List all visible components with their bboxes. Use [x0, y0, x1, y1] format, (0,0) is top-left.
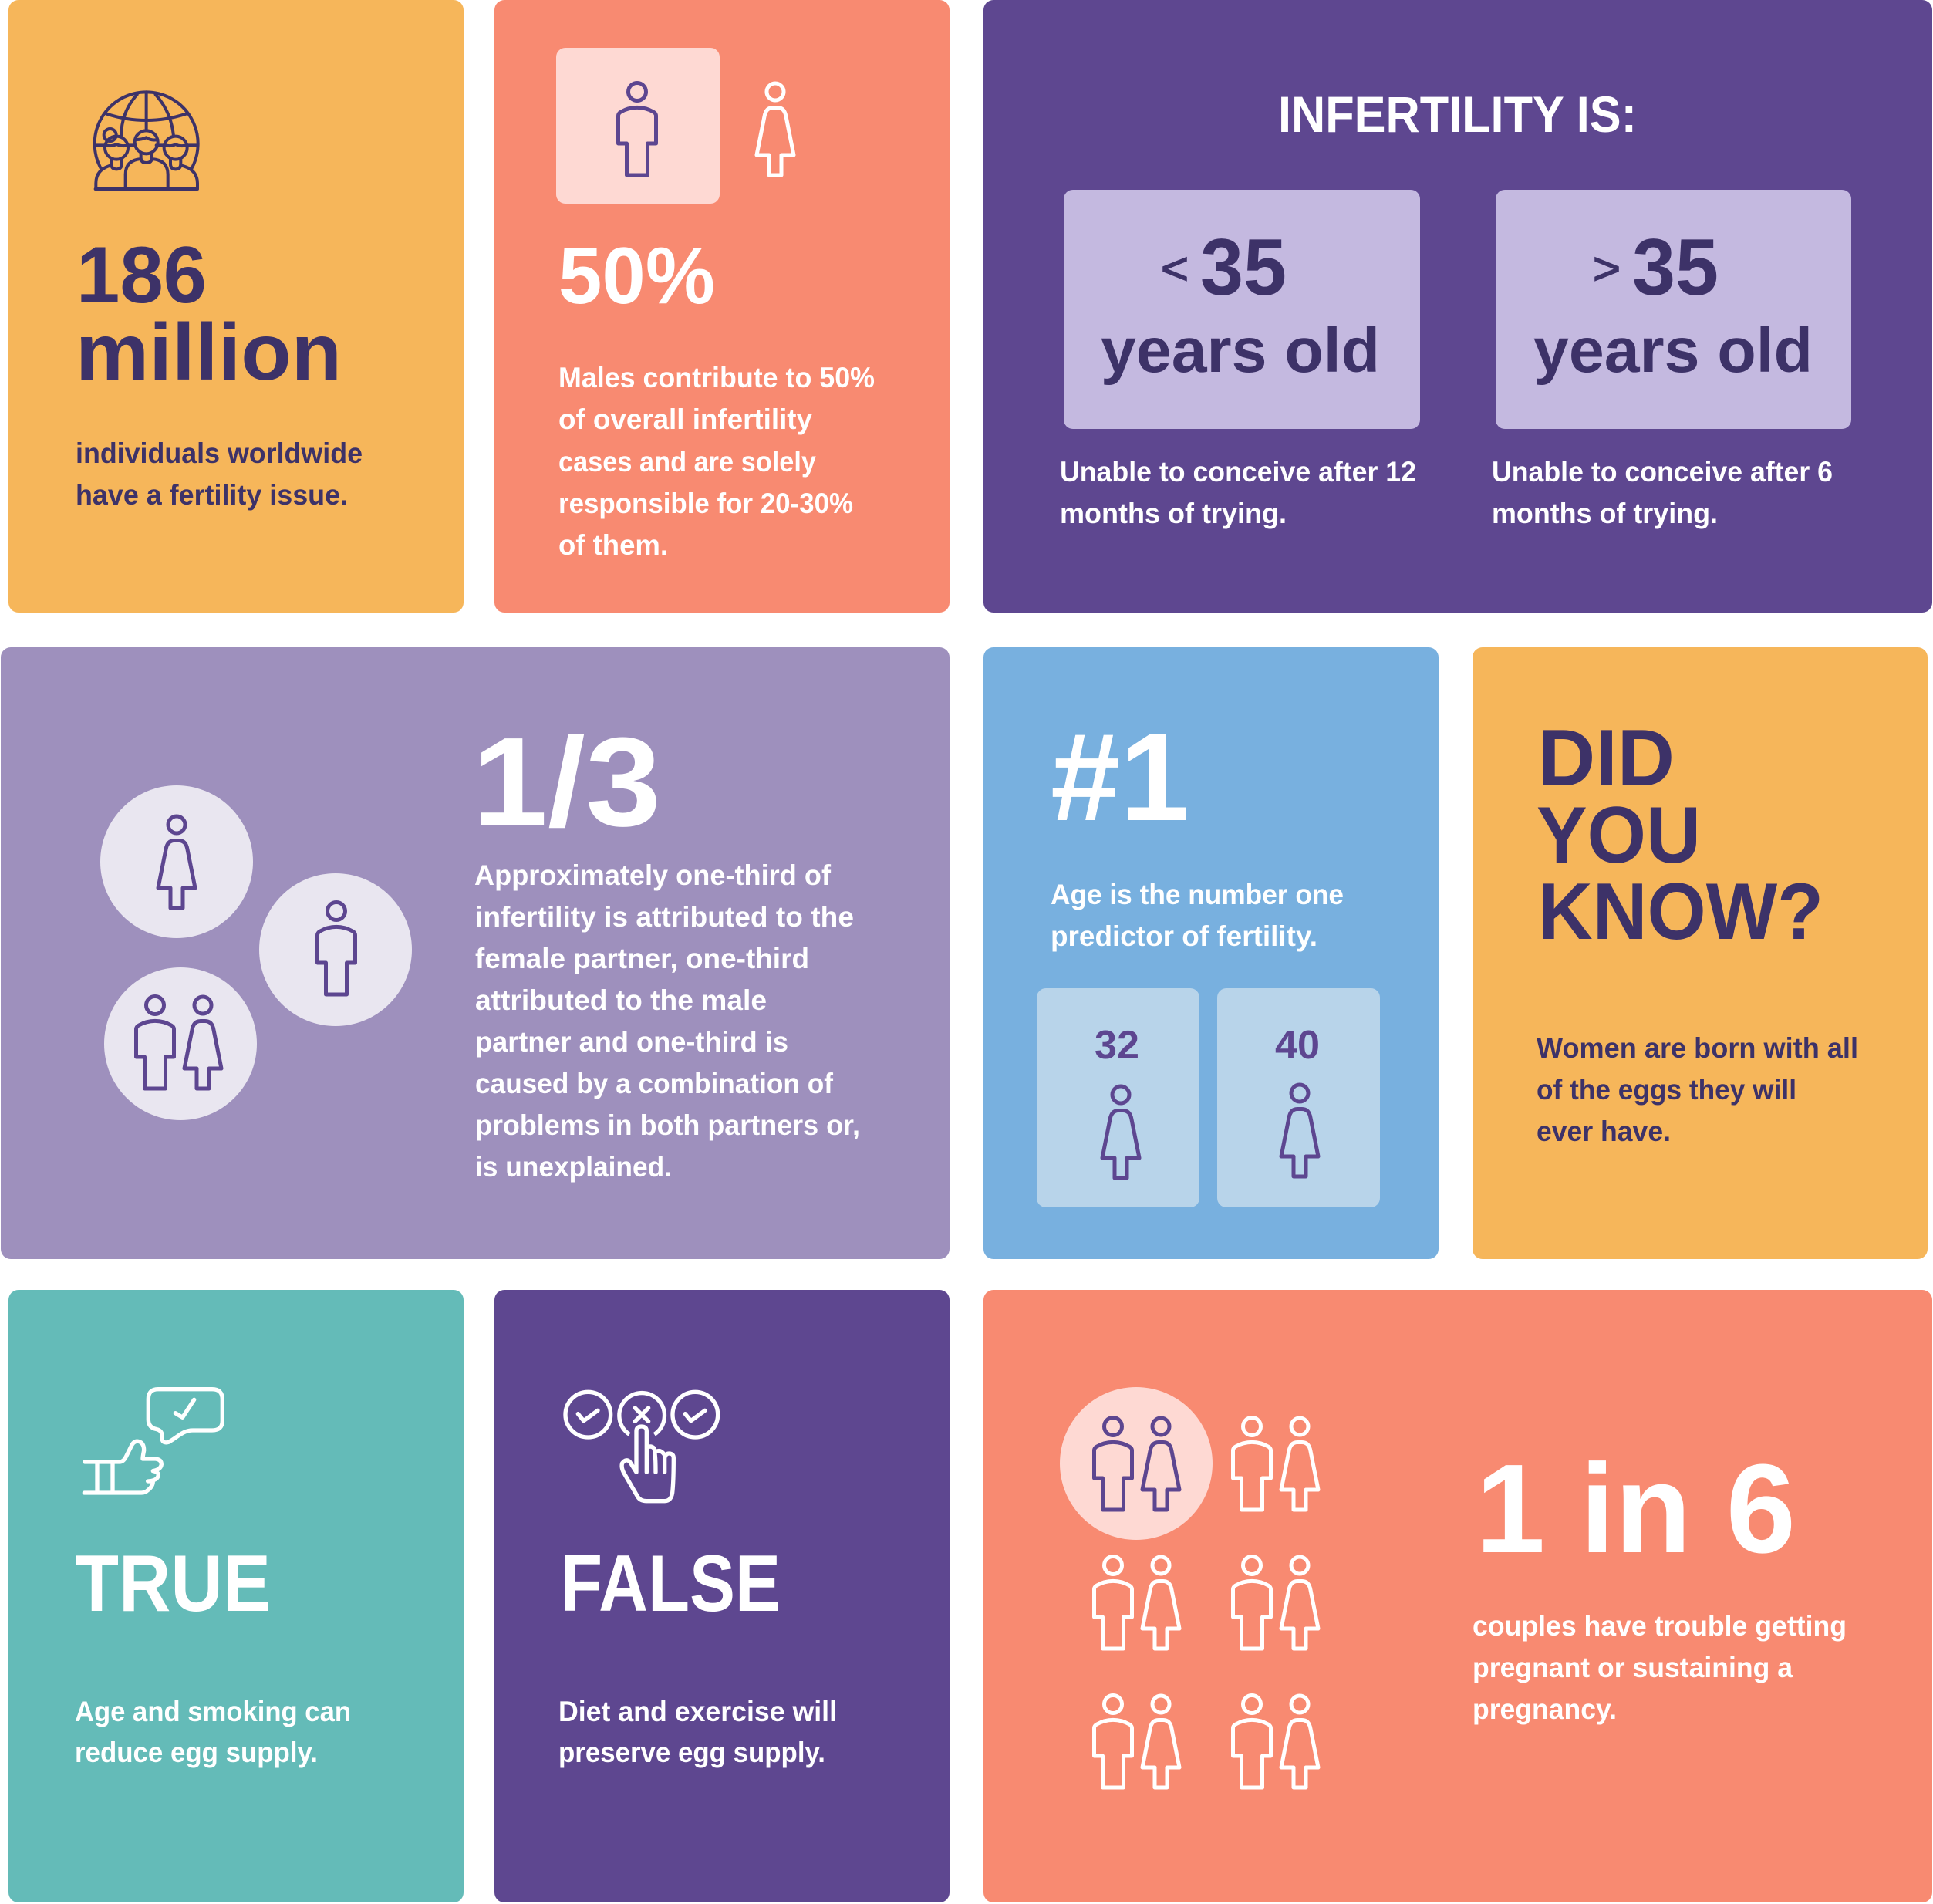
box: over 35: 35	[1632, 223, 1719, 312]
text: one third explanation: partner and one-third is	[475, 1026, 788, 1058]
text: males contribute: of them.	[558, 529, 668, 561]
text: individuals worldwide: have a fertility issue.	[76, 479, 348, 511]
icon: couple row 2 left	[1094, 1557, 1179, 1649]
heading: 186 million: million	[76, 308, 342, 397]
text: eggs fact: ever have.	[1537, 1116, 1671, 1147]
box: over 35: years old	[1533, 316, 1813, 386]
text: over 35 definition	[1492, 456, 1833, 529]
text: over 35 definition: months of trying.	[1492, 498, 1718, 529]
panel: false	[494, 1290, 950, 1902]
text: males contribute: cases and are solely	[558, 446, 816, 478]
heading: 50%: 50%	[558, 231, 715, 321]
text: one third explanation: attributed to the male	[475, 984, 767, 1016]
icon: hand selecting option	[565, 1392, 718, 1501]
box: over 35: >	[1593, 244, 1621, 294]
text: under 35 definition: Unable to conceive after 12	[1060, 456, 1416, 488]
text: one third explanation: infertility is attributed to the	[475, 901, 854, 933]
heading: 186 million: 186	[76, 231, 207, 320]
icon: couple row 1 right	[1233, 1418, 1318, 1510]
icon: thumbs up with speech bubble	[84, 1389, 222, 1493]
text: one third explanation: is unexplained.	[475, 1151, 672, 1183]
text: age and smoking	[75, 1696, 351, 1768]
text: individuals worldwide	[76, 437, 363, 511]
text: males contribute	[558, 362, 875, 561]
text: one third explanation: problems in both partners or,	[475, 1109, 860, 1141]
icon: woman	[757, 83, 794, 175]
text: males contribute: of overall infertility	[558, 403, 812, 435]
text: age and smoking: Age and smoking can	[75, 1696, 351, 1727]
text: age predictor	[1051, 879, 1344, 952]
text: one third explanation: female partner, one-third	[475, 943, 809, 974]
text: individuals worldwide: individuals worldwide	[76, 437, 363, 469]
panel: one third	[1, 647, 950, 1259]
box: under 35: years old	[1101, 316, 1380, 386]
panel: number one	[983, 647, 1439, 1259]
heading: true: TRUE	[75, 1539, 271, 1629]
box: age 32: 32	[1095, 1023, 1139, 1068]
text: eggs fact	[1537, 1032, 1858, 1147]
panel: true	[8, 1290, 464, 1902]
text: one third explanation: Approximately one-third of	[474, 859, 832, 891]
highlight box	[556, 48, 720, 204]
text: eggs fact: Women are born with all	[1537, 1032, 1858, 1064]
text: one third explanation	[474, 859, 860, 1183]
heading: did you know: KNOW?	[1538, 867, 1823, 957]
heading: 1 in 6: 1 in 6	[1476, 1438, 1796, 1579]
icon: couple row 2 right	[1233, 1557, 1318, 1649]
box: age 40: 40	[1275, 1023, 1320, 1068]
text: diet and exercise: preserve egg supply.	[558, 1737, 825, 1768]
heading: false: FALSE	[561, 1539, 781, 1629]
box: age 40	[1217, 988, 1380, 1207]
text: diet and exercise	[558, 1696, 837, 1768]
text: couples trouble: pregnancy.	[1473, 1693, 1617, 1725]
box: age 32	[1037, 988, 1199, 1207]
box: under 35	[1064, 190, 1420, 429]
text: over 35 definition: Unable to conceive after 6	[1492, 456, 1833, 488]
text: age and smoking: reduce egg supply.	[75, 1737, 318, 1768]
panel: 50% males	[494, 0, 950, 613]
icon: couple row 3 left	[1094, 1696, 1179, 1788]
text: under 35 definition: months of trying.	[1060, 498, 1287, 529]
text: males contribute: responsible for 20-30%	[558, 488, 853, 519]
icon: highlighted couple	[1060, 1387, 1213, 1540]
box: under 35: 35	[1200, 223, 1287, 312]
text: eggs fact: of the eggs they will	[1537, 1074, 1796, 1106]
text: couples trouble	[1473, 1610, 1847, 1725]
panel: infertility is	[983, 0, 1932, 613]
heading: did you know	[1537, 714, 1823, 957]
icon: man	[619, 83, 656, 175]
heading: 1/3: 1/3	[472, 711, 661, 852]
text: couples trouble: couples have trouble getting	[1473, 1610, 1847, 1642]
heading: did you know: YOU	[1537, 791, 1701, 880]
panel: 1 in 6	[983, 1290, 1932, 1902]
box: under 35: <	[1161, 244, 1189, 294]
heading: did you know: DID	[1538, 714, 1675, 803]
icon: couple row 3 right	[1233, 1696, 1318, 1788]
text: under 35 definition	[1060, 456, 1416, 529]
box: over 35	[1496, 190, 1851, 429]
text: age predictor: Age is the number one	[1051, 879, 1344, 910]
text: males contribute: Males contribute to 50%	[558, 362, 875, 393]
icon circle: couple	[104, 967, 257, 1120]
panel: 186 million	[8, 0, 464, 613]
icon circle: woman	[100, 785, 253, 938]
panel: did you know	[1473, 647, 1928, 1259]
heading: infertility is: INFERTILITY IS:	[1278, 86, 1637, 143]
text: diet and exercise: Diet and exercise will	[558, 1696, 837, 1727]
text: couples trouble: pregnant or sustaining a	[1473, 1652, 1793, 1683]
text: age predictor: predictor of fertility.	[1051, 920, 1317, 952]
heading: #1: #1	[1051, 707, 1189, 847]
text: one third explanation: caused by a combination of	[475, 1068, 834, 1099]
icon: globe with people	[95, 92, 198, 189]
icon circle: man	[259, 873, 412, 1026]
heading: 186 million	[76, 231, 342, 397]
